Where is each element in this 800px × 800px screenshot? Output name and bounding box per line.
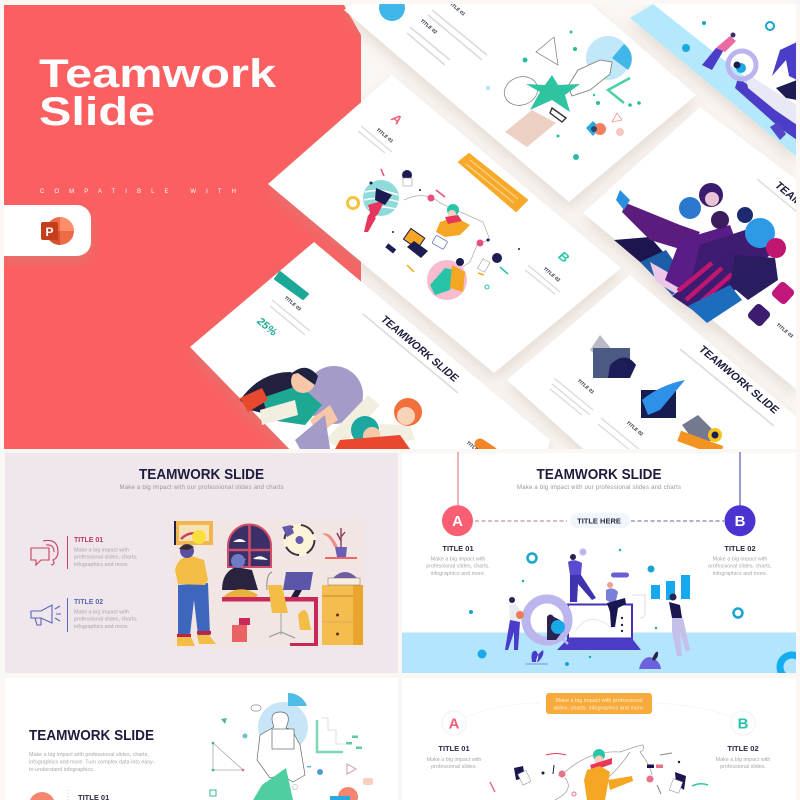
node B: B (738, 716, 749, 732)
slide card: star illustration (344, 0, 696, 202)
card heading: TEAMWORK SLIDE (378, 314, 461, 384)
card heading: TEAMWORK SLIDE (696, 344, 781, 416)
block: title 01: infographics and more. (431, 571, 485, 577)
panel: A and B slide (402, 452, 800, 679)
title label: TITLE (464, 440, 479, 453)
step illustrations (590, 335, 723, 457)
block: title 02: Make a big impact with (74, 610, 129, 616)
slide card: blue band (630, 4, 797, 157)
card subtitle (363, 314, 458, 393)
person right (670, 594, 676, 600)
illustration: team group (614, 183, 786, 323)
slide card: group of people (583, 107, 800, 390)
block: title 01: Make a big impact with (427, 757, 481, 763)
title 03: TITLE 03 (282, 295, 303, 312)
card text: TITLE 02 (418, 18, 439, 35)
slide card: centre network (268, 75, 621, 373)
node B (731, 711, 755, 735)
plants (532, 650, 543, 662)
hero collage (4, 0, 800, 460)
block: title 02: professional slides, charts, (74, 616, 138, 622)
main title (40, 58, 276, 126)
illustration: laptop team (469, 548, 800, 679)
panel: lilac slide (5, 453, 398, 673)
icon: chat bubbles (31, 540, 58, 565)
letter B: B (555, 249, 573, 265)
cabinet (322, 585, 353, 645)
body text: Make a big impact with professional slides, charts, (29, 752, 149, 758)
slide card: bottom right steps (507, 275, 800, 457)
window (228, 524, 271, 567)
compatible with label: COMPATIBLE WITH (40, 189, 236, 195)
callout: orange: Make a big impact with professional (555, 698, 643, 704)
stat 25%: 25% (254, 316, 280, 338)
teal pill (275, 272, 308, 299)
block: title 02: infographics and more. (713, 571, 767, 577)
illustration: office (172, 520, 365, 648)
title 02: TITLE 02 (624, 420, 645, 437)
block: title 01: Make a big impact with (74, 548, 129, 554)
blue corner circle (379, 4, 405, 21)
card subtitle (680, 349, 774, 426)
main title: Slide (39, 90, 155, 134)
block: title 02: professional slides, charts, (708, 564, 772, 570)
card label: TITLE 03 (774, 322, 795, 339)
block: title 01: infographics and more. (74, 562, 129, 568)
letter A: A (388, 111, 407, 127)
lavender ring (526, 599, 568, 641)
illustration: group at table (240, 366, 422, 449)
red title panel (4, 5, 361, 449)
sitting person (222, 567, 258, 590)
PowerPoint badge: P (45, 225, 54, 239)
person on laptop (570, 554, 576, 560)
panel: lower left slide (5, 678, 398, 800)
desk (222, 597, 318, 602)
band: light blue floor (402, 632, 796, 673)
monitor (283, 572, 313, 590)
callout: orange: slides, charts, infographics and more. (553, 706, 645, 712)
illustration: woman and star (536, 37, 558, 65)
pill: title here: TITLE HERE (577, 516, 621, 526)
chair (268, 585, 288, 613)
node B (724, 452, 756, 536)
body text (29, 752, 155, 773)
node B: B (735, 513, 746, 530)
heading: TEAMWORK SLIDE (536, 466, 662, 483)
block: title 02: TITLE 02 (727, 744, 759, 753)
block: title 02 (716, 744, 770, 770)
block: title 02: professional slides. (720, 764, 766, 770)
panel: lower right slide (402, 678, 796, 800)
orange tab (480, 444, 492, 452)
node A: A (452, 513, 463, 530)
illustration: people connected by strings (348, 169, 520, 300)
block: title 01 (427, 744, 481, 770)
block: title 01: TITLE 01 (438, 744, 470, 753)
target circle (283, 524, 316, 556)
block: title 02: TITLE 02 (74, 599, 103, 606)
body text: infographics and more. Turn complex data into easy- (29, 760, 155, 766)
orange callout (459, 154, 527, 211)
slide card: lower left team (190, 242, 550, 460)
block: title 01 (426, 544, 490, 577)
block: title 01: professional slides, charts, (74, 554, 138, 560)
icon tile: magenta (772, 282, 794, 304)
block: title 01: professional slides. (431, 764, 477, 770)
subtitle: Make a big impact with our professional slides and charts (517, 485, 681, 491)
block: title 02: Make a big impact with (716, 757, 770, 763)
callout: orange (546, 693, 652, 714)
block: title 02: TITLE 02 (724, 544, 756, 553)
block: title 01: TITLE 01 (74, 537, 103, 544)
block: title 01: professional slides, charts, (426, 564, 490, 570)
illustration: woman with blue circle (210, 693, 373, 800)
block: title 01: Make a big impact with (431, 556, 485, 562)
pill: title here (570, 513, 630, 528)
node A (442, 711, 466, 735)
icon: megaphone (31, 605, 61, 625)
seated person (607, 582, 613, 588)
block: title 01 (68, 536, 138, 569)
node A (442, 452, 473, 536)
subtitle: Make a big impact with our professional slides and charts (120, 485, 284, 491)
orange marker (29, 792, 55, 800)
block: title 02 (68, 598, 138, 632)
icon tile: purple (748, 304, 770, 326)
PowerPoint badge (4, 205, 91, 256)
slide card: star illustration: TITLE 01 (446, 0, 467, 17)
title 01: TITLE 01 (575, 378, 596, 395)
shelf plant (325, 557, 357, 559)
title 02: TITLE 02 (541, 266, 562, 283)
heading: TEAMWORK SLIDE (29, 727, 154, 744)
block: title 02 (708, 544, 772, 577)
heading: TEAMWORK SLIDE (139, 466, 264, 483)
block: title 02: Make a big impact with (713, 556, 767, 562)
standing person (178, 583, 210, 635)
block: title 01: TITLE 01 (442, 544, 474, 553)
person left (509, 597, 515, 603)
main title: Teamwork (39, 52, 277, 96)
illustration: connected figure (490, 745, 708, 800)
title 01: TITLE 01 (374, 127, 395, 144)
node A: A (449, 716, 460, 732)
body text: to-understand infographics. (29, 767, 94, 773)
block: title 02: infographics and more. (74, 624, 129, 630)
